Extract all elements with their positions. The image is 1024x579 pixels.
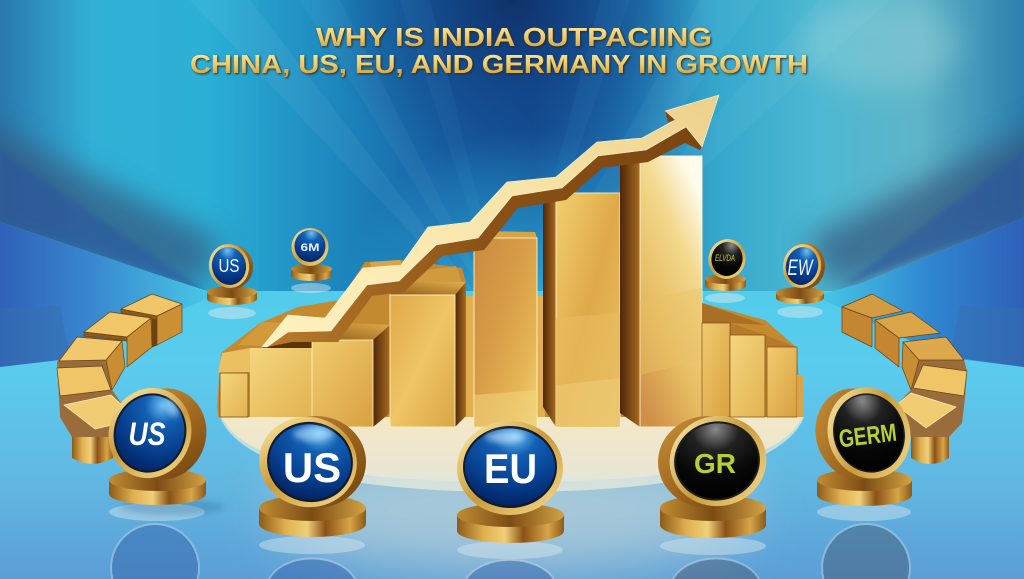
background sky with rays: [0, 0, 1024, 340]
coin: US small back left: [205, 240, 257, 305]
gold block arc left: [57, 294, 182, 464]
coin: EU front centre: EU: [484, 445, 537, 492]
coin: US front: US: [283, 444, 341, 491]
gold block arc right: [842, 294, 967, 464]
title: WHY IS INDIA OUTPACIING: [316, 22, 712, 52]
bar 3: [390, 282, 466, 427]
coin reflections on floor: [109, 283, 911, 579]
coin: black small back right: ELVDA: [715, 253, 735, 263]
coin: US small back left: US: [218, 256, 240, 276]
bar 1: [250, 332, 312, 417]
title: CHINA, US, EU, AND GERMANY IN GROWTH: [190, 49, 808, 79]
title: [190, 22, 808, 79]
coin: EU front centre: [457, 421, 564, 543]
coin: US front far left: US: [128, 416, 166, 452]
coin: GERM front far right: GERM: [837, 419, 898, 453]
coin: EW small back right: [776, 241, 825, 304]
growth arrow: [262, 95, 719, 347]
gold dome of blocks behind the bars: [217, 260, 801, 417]
coin: 6M small back left: 6M: [300, 242, 320, 254]
coin: 6M small back left: [291, 228, 332, 281]
coin: US front: [252, 409, 366, 537]
floor: [0, 218, 1024, 579]
coin: US front far left: [97, 377, 224, 515]
coin: GERM front far right: [804, 377, 922, 506]
coin: GR front: [658, 408, 774, 538]
bar 4: [474, 231, 537, 427]
coin: black small back right: [705, 236, 749, 291]
bar 2: [312, 322, 390, 427]
coin: EW small back right: EW: [788, 255, 814, 280]
bar 5: [543, 193, 620, 427]
small right bars: [702, 303, 803, 417]
bar 6: [620, 156, 702, 427]
coin: GR front: GR: [694, 448, 736, 479]
